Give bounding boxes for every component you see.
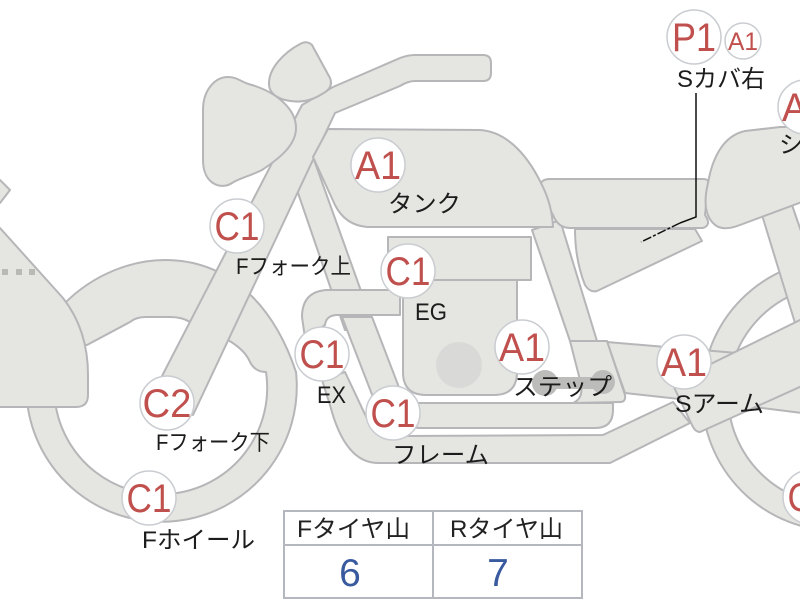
marker: lower fork: Fフォーク下 — [156, 430, 270, 455]
dotted centre line — [2, 269, 35, 275]
marker: frame — [366, 386, 489, 469]
marker: step — [495, 320, 612, 401]
marker: engine: C1 — [386, 250, 430, 294]
marker: upper fork: C1 — [214, 205, 260, 249]
marker: side cover right — [667, 10, 765, 93]
engine block — [403, 280, 517, 395]
tail cowl — [706, 127, 800, 228]
marker: engine — [381, 244, 447, 326]
marker: engine: EG — [415, 299, 447, 326]
marker: side cover right: Sカバ右 — [677, 66, 765, 93]
marker: front wheel: C1 — [126, 477, 172, 521]
down tube — [297, 157, 375, 330]
leader line for side cover — [641, 93, 696, 242]
front tire value: 6 — [339, 552, 361, 595]
step plate — [570, 341, 625, 403]
marker: tank — [351, 138, 461, 218]
marker: swing arm — [657, 335, 764, 418]
rear tire value: 7 — [487, 552, 509, 595]
marker: swing arm: A1 — [661, 341, 707, 385]
meter — [269, 42, 331, 102]
rear tire heading: Rタイヤ山 — [450, 516, 563, 543]
marker: tank: A1 — [355, 144, 401, 188]
step bar — [532, 370, 615, 396]
fuel tank — [313, 129, 553, 227]
rear wheel — [702, 259, 800, 531]
marker: step: A1 — [499, 326, 545, 370]
exhaust pipe — [302, 290, 400, 338]
marker: frame: フレーム — [392, 442, 489, 469]
swing arm — [607, 342, 800, 414]
marker: step: ステップ — [513, 374, 612, 401]
inner frame rail — [342, 317, 613, 428]
tire tread table — [284, 511, 582, 598]
marker: exhaust: C1 — [300, 333, 344, 377]
marker: lower fork — [140, 376, 270, 455]
marker: front wheel: Fホイール — [142, 527, 255, 554]
marker: frame: C1 — [370, 392, 416, 436]
marker: side cover right: P1 — [672, 16, 716, 60]
side cover — [575, 229, 702, 291]
front rider fairing — [0, 228, 88, 407]
marker: tank: タンク — [388, 191, 461, 218]
rear vertical frame tube — [762, 205, 800, 330]
marker: upper fork: Fフォーク上 — [236, 254, 351, 279]
marker: upper fork — [210, 199, 351, 279]
front tire heading: Fタイヤ山 — [297, 516, 410, 543]
seat — [540, 179, 708, 228]
marker: exhaust — [295, 327, 349, 409]
headlight — [203, 77, 296, 186]
marker: exhaust: EX — [317, 382, 346, 409]
main rear frame tube — [532, 220, 597, 341]
marker: lower fork: C2 — [142, 382, 192, 426]
marker: rear seat — [778, 80, 800, 159]
fairing tip — [0, 180, 10, 203]
marker: side cover right: A1 — [728, 28, 758, 56]
outer frame rail — [322, 372, 690, 463]
marker: rear wheel — [783, 470, 800, 524]
marker: swing arm: Sアーム — [675, 391, 764, 418]
fork and handlebar — [162, 55, 491, 415]
engine crank cover — [436, 342, 482, 388]
rear shock bar — [672, 319, 800, 432]
front wheel and fender — [27, 260, 297, 522]
marker: front wheel — [122, 471, 255, 554]
cylinder head — [388, 237, 531, 280]
